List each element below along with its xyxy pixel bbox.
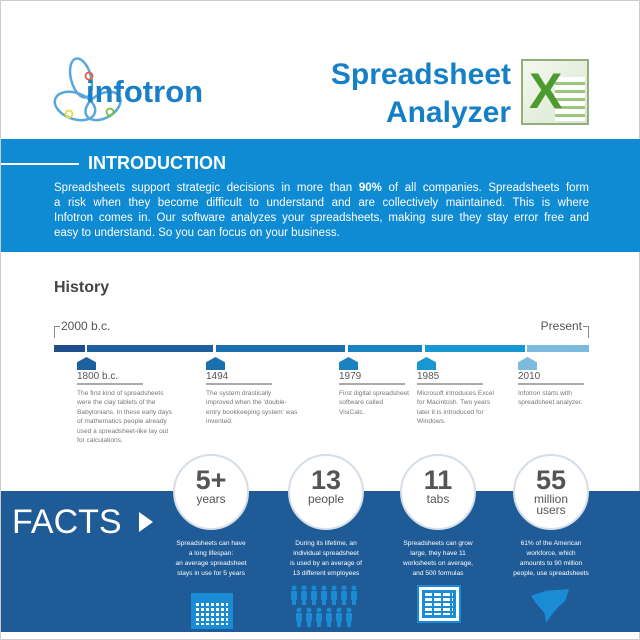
fact text 2: is used by an average of — [290, 560, 362, 567]
event 2010: 2010 — [518, 371, 540, 382]
fact: 11 tabs: tabs — [427, 492, 449, 506]
event 1494: 1494 — [206, 371, 228, 382]
icon: people — [291, 586, 357, 627]
fact text 3: Spreadsheets can grow — [403, 540, 473, 547]
fact text 1: a long lifespan: — [189, 550, 233, 557]
logo: infotron: infotron — [86, 74, 203, 109]
event 2010: Infotron starts with spreadsheet analyzer. — [518, 390, 583, 406]
title — [331, 58, 511, 129]
fact text 3: and 500 formulas — [413, 570, 463, 577]
event 1979: 1979 — [339, 371, 361, 382]
intro text — [54, 182, 589, 239]
title: Analyzer — [386, 96, 511, 129]
event 2010 — [518, 357, 584, 406]
fact: 55 million: 55 — [536, 465, 566, 495]
icon: excel — [521, 59, 589, 125]
icon: excel: X — [529, 63, 562, 119]
fact text 4: workforce, which — [526, 550, 576, 557]
heading: facts: FACTS — [12, 503, 122, 541]
fact text 3: large, they have 11 — [410, 550, 466, 557]
fact: 55 million: users — [536, 503, 566, 517]
panel: facts — [1, 491, 640, 632]
intro text: Spreadsheets support strategic decisions in more than 90% of all companies. Spreadsheets form — [54, 182, 589, 194]
fact text 1: stays in use for 5 years — [177, 570, 245, 577]
event 1494 — [206, 357, 298, 425]
event 1985 — [417, 357, 494, 425]
event 1979 — [339, 357, 409, 416]
fact text 1 — [175, 540, 247, 577]
timeline labels: Present — [541, 319, 582, 333]
panel: introduction — [1, 139, 640, 252]
fact text 3 — [403, 540, 473, 577]
fact: 55 million — [513, 454, 589, 530]
heading: introduction: INTRODUCTION — [88, 153, 226, 173]
event 1985: Microsoft introduces Excel for Macintosh. Two years later it is introduced for Windows. — [417, 390, 494, 425]
fact: 55 million: million — [534, 492, 568, 506]
intro text: Infotron comes in. Our software analyzes your spreadsheets, making sure they stay error free and — [54, 212, 589, 224]
fact: 13 people — [288, 454, 364, 530]
fact: 5+ years: years — [196, 492, 226, 506]
fact text 2: During its lifetime, an — [295, 540, 357, 547]
icon: north america — [531, 589, 569, 623]
timeline bar — [54, 345, 589, 352]
fact: 13 people: people — [308, 492, 344, 506]
icon: sheet — [419, 587, 459, 621]
heading: history: History — [54, 279, 109, 296]
fact: 5+ years: 5+ — [196, 465, 226, 495]
fact text 4: 61% of the American — [521, 540, 581, 547]
event 1800 bc — [77, 357, 172, 444]
event 1800 bc: 1800 b.c. — [77, 371, 118, 382]
fact: 11 tabs — [400, 454, 476, 530]
fact text 2: individual spreadsheet — [293, 550, 359, 557]
timeline labels: 2000 b.c. — [61, 319, 110, 333]
fact text 2: 13 different employees — [293, 570, 359, 577]
fact text 4: amounts to 90 million — [520, 560, 582, 567]
fact text 4 — [513, 540, 589, 577]
fact text 4: people, use spreadsheets — [513, 570, 589, 577]
intro text: a risk when they become difficult to understand and are collectively maintained. This is where — [54, 197, 589, 209]
event 1800 bc: The first kind of spreadsheets were the clay tablets of the Babylonians. In these early days of mathematics people already used a spreadsheet-like lay out for calculations. — [77, 390, 172, 444]
arrow — [139, 512, 153, 532]
fact text 2 — [290, 540, 362, 577]
fact text 1: an average spreadsheet — [175, 560, 247, 567]
fact text 1: Spreadsheets can have — [176, 540, 246, 547]
event 1979: First digital spreadsheet software called VisiCalc. — [339, 390, 409, 416]
icon: calendar — [191, 593, 233, 629]
event 1985: 1985 — [417, 371, 439, 382]
event 1494: The system drastically improved when the 'double-entry bookkeeping system' was invented. — [206, 390, 297, 425]
timeline labels — [54, 319, 589, 338]
logo: infotron — [53, 57, 203, 122]
fact text 3: worksheets on average, — [403, 560, 473, 567]
fact: 11 tabs: 11 — [424, 465, 452, 495]
intro text: easy to understand. So you can focus on your business. — [54, 227, 340, 239]
title: Spreadsheet — [331, 58, 511, 91]
fact: 5+ years — [173, 454, 249, 530]
fact: 13 people: 13 — [311, 465, 341, 495]
